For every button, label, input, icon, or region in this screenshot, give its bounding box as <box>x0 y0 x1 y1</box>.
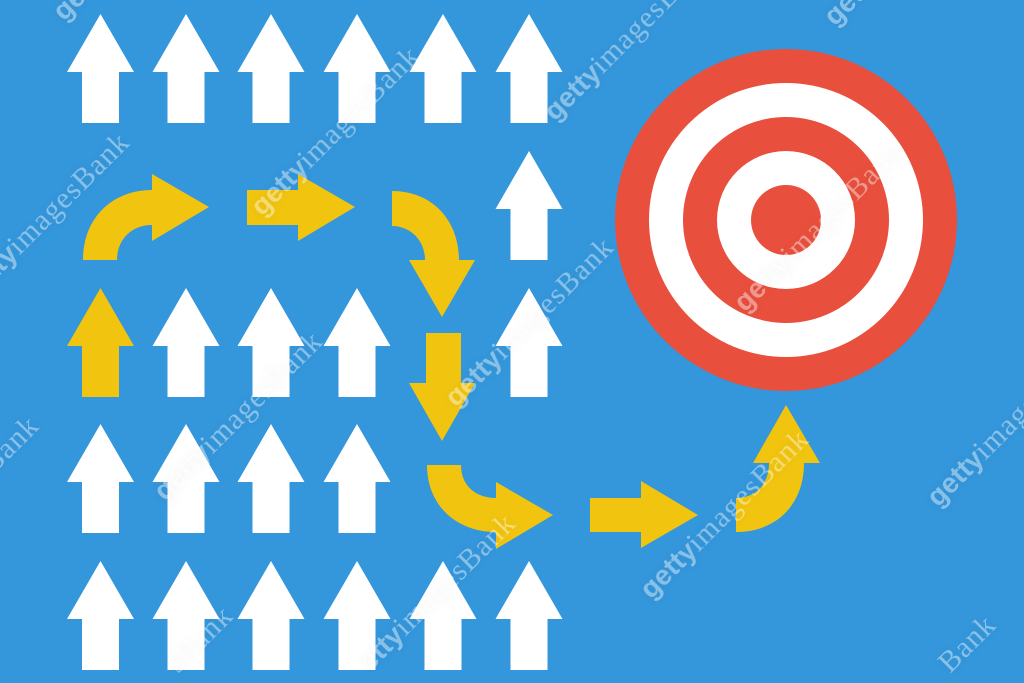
yellow arrow: curve down to right <box>427 465 553 549</box>
yellow arrow: right <box>247 174 355 241</box>
watermarks: gettyimagesBank <box>633 422 815 605</box>
yellow arrow: curve right to down <box>392 191 475 317</box>
watermarks: sBank <box>160 599 240 679</box>
watermarks: Bank <box>932 608 1003 679</box>
watermarks: gettyimagesBank <box>438 230 620 413</box>
watermarks: gettyimagesBank <box>147 324 329 507</box>
yellow arrow: down <box>409 333 475 441</box>
target bullseye <box>615 49 957 391</box>
watermarks: gettyimagesBank <box>727 135 909 318</box>
watermarks: gettyimagesBank <box>244 39 426 222</box>
yellow arrow: right to target <box>590 481 698 548</box>
yellow arrow: curve up to right <box>83 174 209 260</box>
watermarks: ettyimagesBank <box>352 506 522 677</box>
yellow arrow: start up <box>67 288 134 397</box>
yellow arrow path <box>67 174 820 549</box>
white arrows grid <box>67 14 562 670</box>
yellow arrow: curve up to target <box>736 405 820 532</box>
